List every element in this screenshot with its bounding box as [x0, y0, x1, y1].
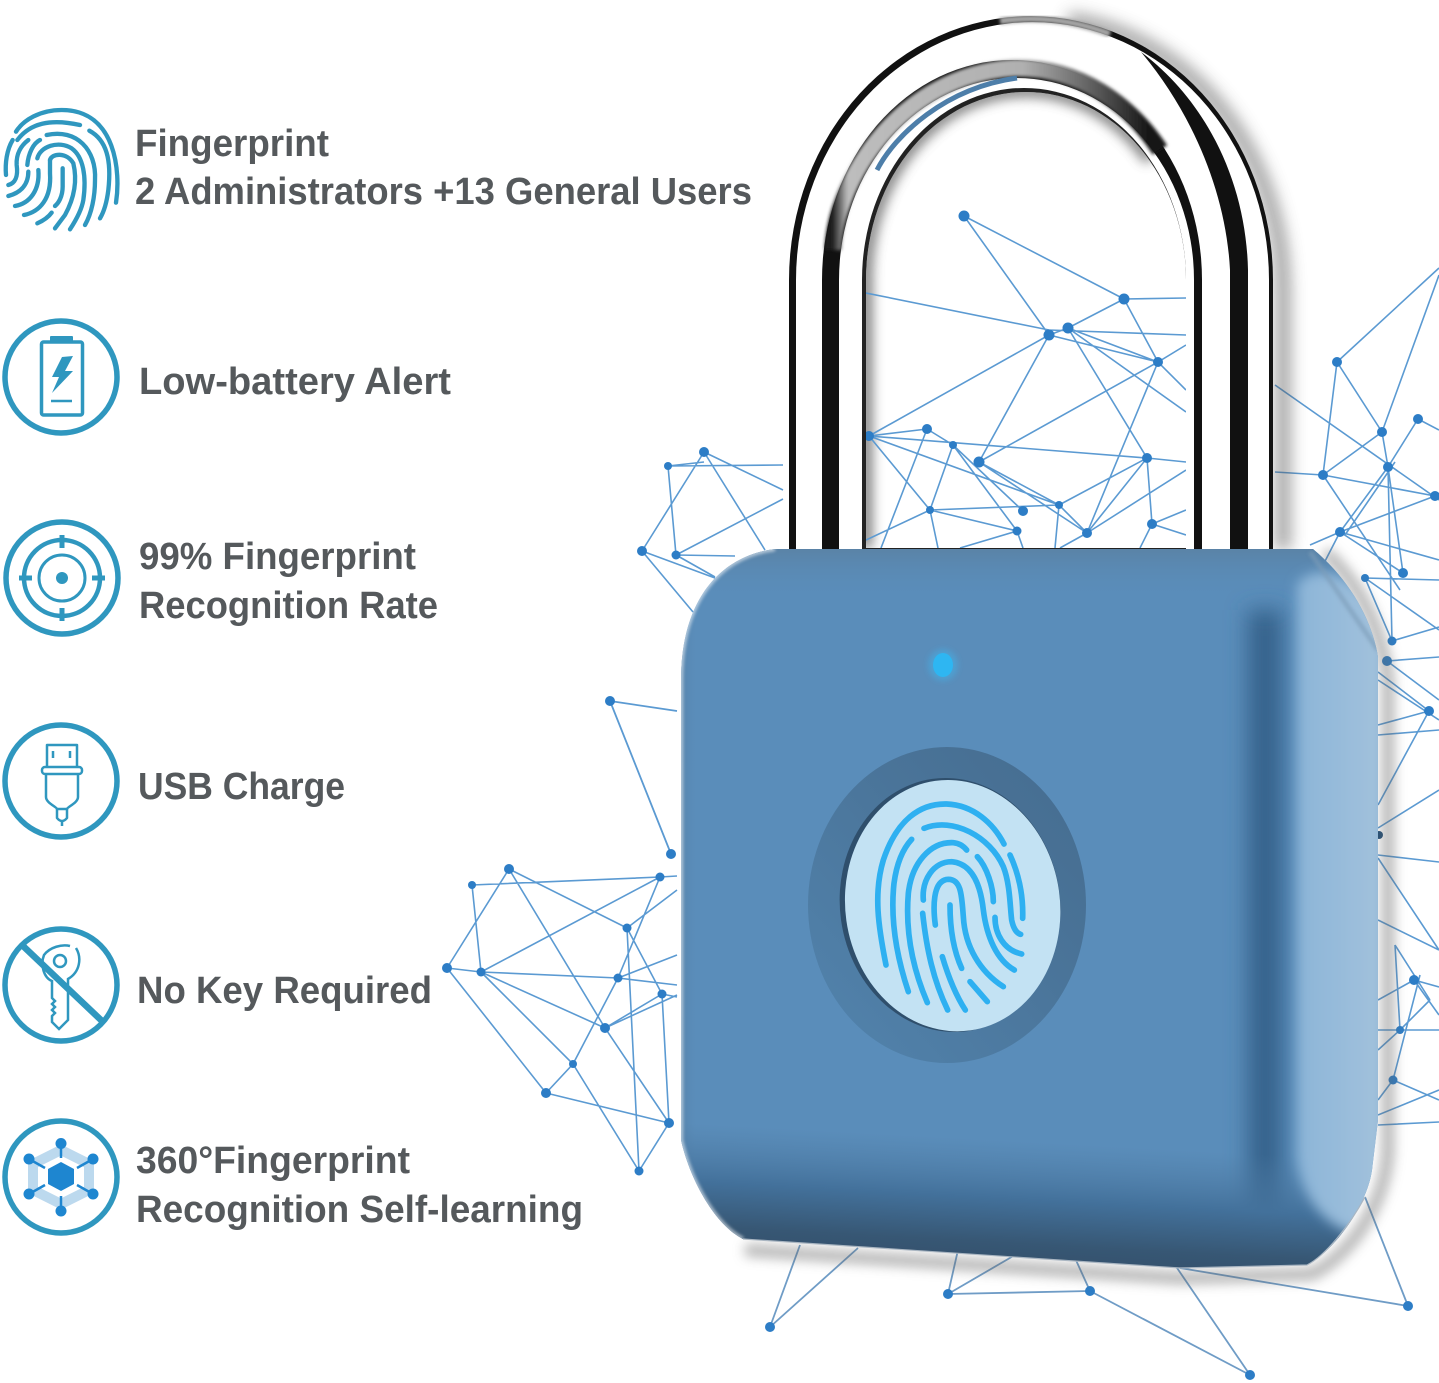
body: feathered left edge: [681, 549, 775, 1239]
icon: battery: [5, 321, 117, 433]
body: upper right highlight: [1310, 552, 1378, 650]
network: inside shackle window: [864, 210, 1186, 548]
text: self-learning: [136, 1140, 583, 1231]
network: left upper cluster: [637, 447, 783, 612]
text: fingerprint users: 2 Administrators +13 General Users: [135, 171, 752, 213]
text: fingerprint users: [135, 123, 752, 213]
text: no key required: No Key Required: [137, 970, 432, 1012]
shackle: outer rim highlight: [1000, 19, 1110, 34]
text: self-learning: Recognition Self-learning: [136, 1189, 583, 1231]
text: fingerprint users: Fingerprint: [135, 123, 329, 165]
shackle: window: [866, 92, 1186, 548]
padlock shackle: [789, 16, 1283, 550]
body: light side panel: [1297, 573, 1385, 1240]
shackle: grey reflection: [833, 68, 1160, 250]
fingerprint sensor recess: [808, 747, 1086, 1063]
body: bottom edge highlight: [743, 1197, 1365, 1268]
fingerprint sensor: [823, 764, 1077, 1046]
icon: self-learning hexagon: [5, 1121, 117, 1233]
shackle: blue reflection: [877, 78, 1017, 170]
network: bottom cluster: [765, 1197, 1413, 1380]
body: drop shadow: [745, 552, 1388, 1278]
text: low battery alert: Low-battery Alert: [139, 361, 451, 403]
icon: fingerprint: [6, 110, 117, 229]
network: right cluster: [1275, 268, 1439, 1125]
text: recognition rate: [139, 536, 438, 627]
shackle: right black band: [1141, 52, 1248, 550]
shackle: inner black band: [822, 60, 1202, 550]
text: self-learning: 360°Fingerprint: [136, 1140, 410, 1182]
network: left lower cluster: [442, 864, 677, 1176]
icon: no key: [5, 929, 117, 1041]
body: dark strip beside side panel: [1248, 610, 1282, 1230]
LED indicator: [928, 649, 958, 681]
text: recognition rate: Recognition Rate: [139, 585, 438, 627]
network: left middle cluster: [605, 696, 677, 859]
icon: target: [6, 522, 118, 634]
padlock body: [670, 540, 1400, 1280]
text: recognition rate: 99% Fingerprint: [139, 536, 416, 578]
text: USB charge: USB Charge: [138, 766, 345, 808]
icon: USB plug: [5, 725, 117, 837]
